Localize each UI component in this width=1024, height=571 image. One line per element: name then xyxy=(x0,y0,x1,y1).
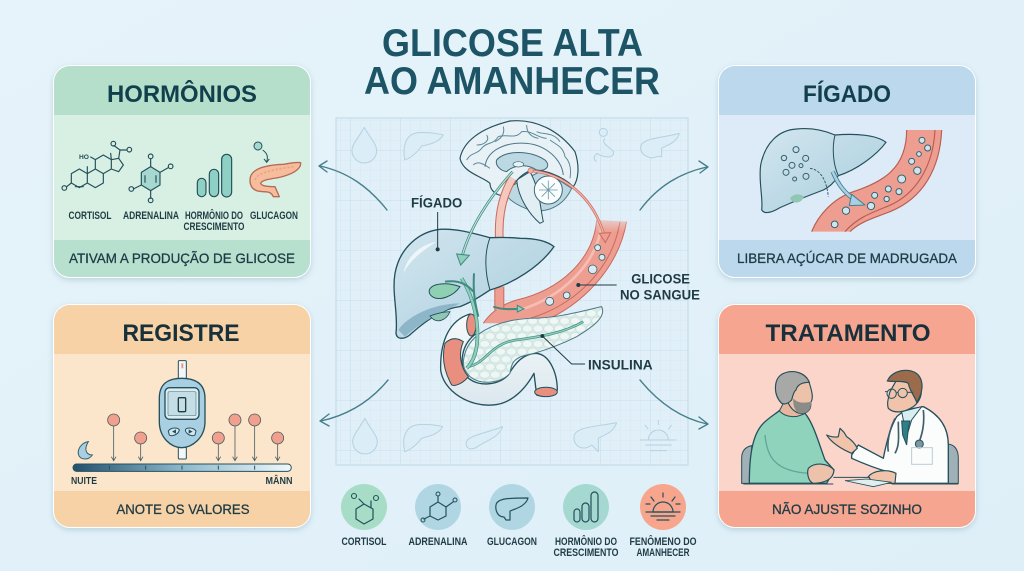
legend row xyxy=(341,484,697,559)
icon: doctor xyxy=(827,370,948,483)
legend: hormônio do crescimento xyxy=(554,484,619,559)
icon: adrenalina molecule xyxy=(129,154,173,203)
legend: glucagon: GLUCAGON xyxy=(487,536,537,548)
icon: blood vessel xyxy=(812,130,942,232)
footer text: LIBERA AÇÚCAR DE MADRUGADA xyxy=(737,250,958,266)
grid background xyxy=(336,118,688,465)
hormone labels: ADRENALINA xyxy=(123,210,179,222)
heading: fígado: FÍGADO xyxy=(803,80,891,108)
icon: growth bars xyxy=(197,154,232,197)
timeline labels xyxy=(71,474,292,487)
hormone labels: CORTISOL xyxy=(68,210,112,222)
icon: cortisol molecule xyxy=(62,141,132,190)
icon: cortisol molecule: HO xyxy=(79,154,89,161)
label: fígado xyxy=(411,195,463,251)
brain xyxy=(460,121,578,223)
duodenum tube xyxy=(441,314,557,405)
hormone labels: CRESCIMENTO xyxy=(184,221,245,233)
hormone icons xyxy=(62,141,301,203)
desk line and paper xyxy=(743,477,958,487)
legend: fenômeno do amanhecer: AMANHECER xyxy=(636,547,690,559)
legend: adrenalina xyxy=(408,484,468,548)
label: glicose no sangue xyxy=(576,271,700,303)
liver xyxy=(394,229,554,338)
icon: moon xyxy=(78,442,92,459)
legend: hormônio do crescimento: CRESCIMENTO xyxy=(554,547,619,559)
label: glicose no sangue: GLICOSE xyxy=(631,271,690,286)
legend: glucagon xyxy=(487,484,537,548)
arrow: sugar release xyxy=(833,172,865,206)
consultation illustration xyxy=(742,370,958,487)
legend: fenômeno do amanhecer xyxy=(630,484,697,559)
registre illustration xyxy=(73,361,291,471)
icon: liver xyxy=(760,129,886,213)
footer text: ANOTE OS VALORES xyxy=(116,501,250,517)
heading: tratamento: TRATAMENTO xyxy=(766,320,930,347)
liver and vessel illustration xyxy=(760,129,942,232)
hormone labels: HORMÔNIO DO xyxy=(185,209,243,222)
footer text: ATIVAM A PRODUÇÃO DE GLICOSE xyxy=(69,250,295,266)
legend: cortisol: CORTISOL xyxy=(342,536,387,548)
pink nerve path xyxy=(499,178,513,310)
ghost icons xyxy=(352,127,679,454)
icon: patient xyxy=(749,372,834,483)
legend: cortisol xyxy=(341,484,387,548)
hormone labels xyxy=(68,209,298,233)
legend: fenômeno do amanhecer: FENÔMENO DO xyxy=(630,535,697,548)
icon: glucose meter xyxy=(159,361,205,459)
heading: hormônios: HORMÔNIOS xyxy=(107,80,257,108)
title xyxy=(364,22,660,103)
hormone labels: GLUCAGON xyxy=(250,210,298,222)
heading: registre: REGISTRE xyxy=(122,320,240,347)
panel: fígado xyxy=(718,65,976,278)
pancreas xyxy=(445,273,603,382)
icon: pancreas xyxy=(250,142,301,197)
chairs xyxy=(742,444,958,483)
footer text: NÃO AJUSTE SOZINHO xyxy=(772,501,922,517)
title: GLICOSE ALTA xyxy=(382,22,643,65)
legend: adrenalina: ADRENALINA xyxy=(408,536,468,548)
panel: registre xyxy=(53,304,311,528)
timeline labels: NUITE xyxy=(71,476,97,487)
timeline bar xyxy=(73,464,291,471)
arrows xyxy=(457,168,611,312)
reading pins xyxy=(108,414,284,461)
central anatomy illustration xyxy=(394,121,700,405)
label: glicose no sangue: NO SANGUE xyxy=(620,288,700,303)
label: insulina: INSULINA xyxy=(588,357,653,372)
legend: hormônio do crescimento: HORMÔNIO DO xyxy=(555,535,617,548)
panel: hormônios xyxy=(53,65,311,278)
panel: tratamento xyxy=(718,304,976,528)
label: insulina xyxy=(540,334,653,372)
title: AO AMANHECER xyxy=(364,60,660,103)
label: fígado: FÍGADO xyxy=(411,195,463,210)
connector arrows xyxy=(319,161,708,429)
blood vessel xyxy=(483,220,627,323)
timeline labels: MÂNN xyxy=(266,474,292,487)
